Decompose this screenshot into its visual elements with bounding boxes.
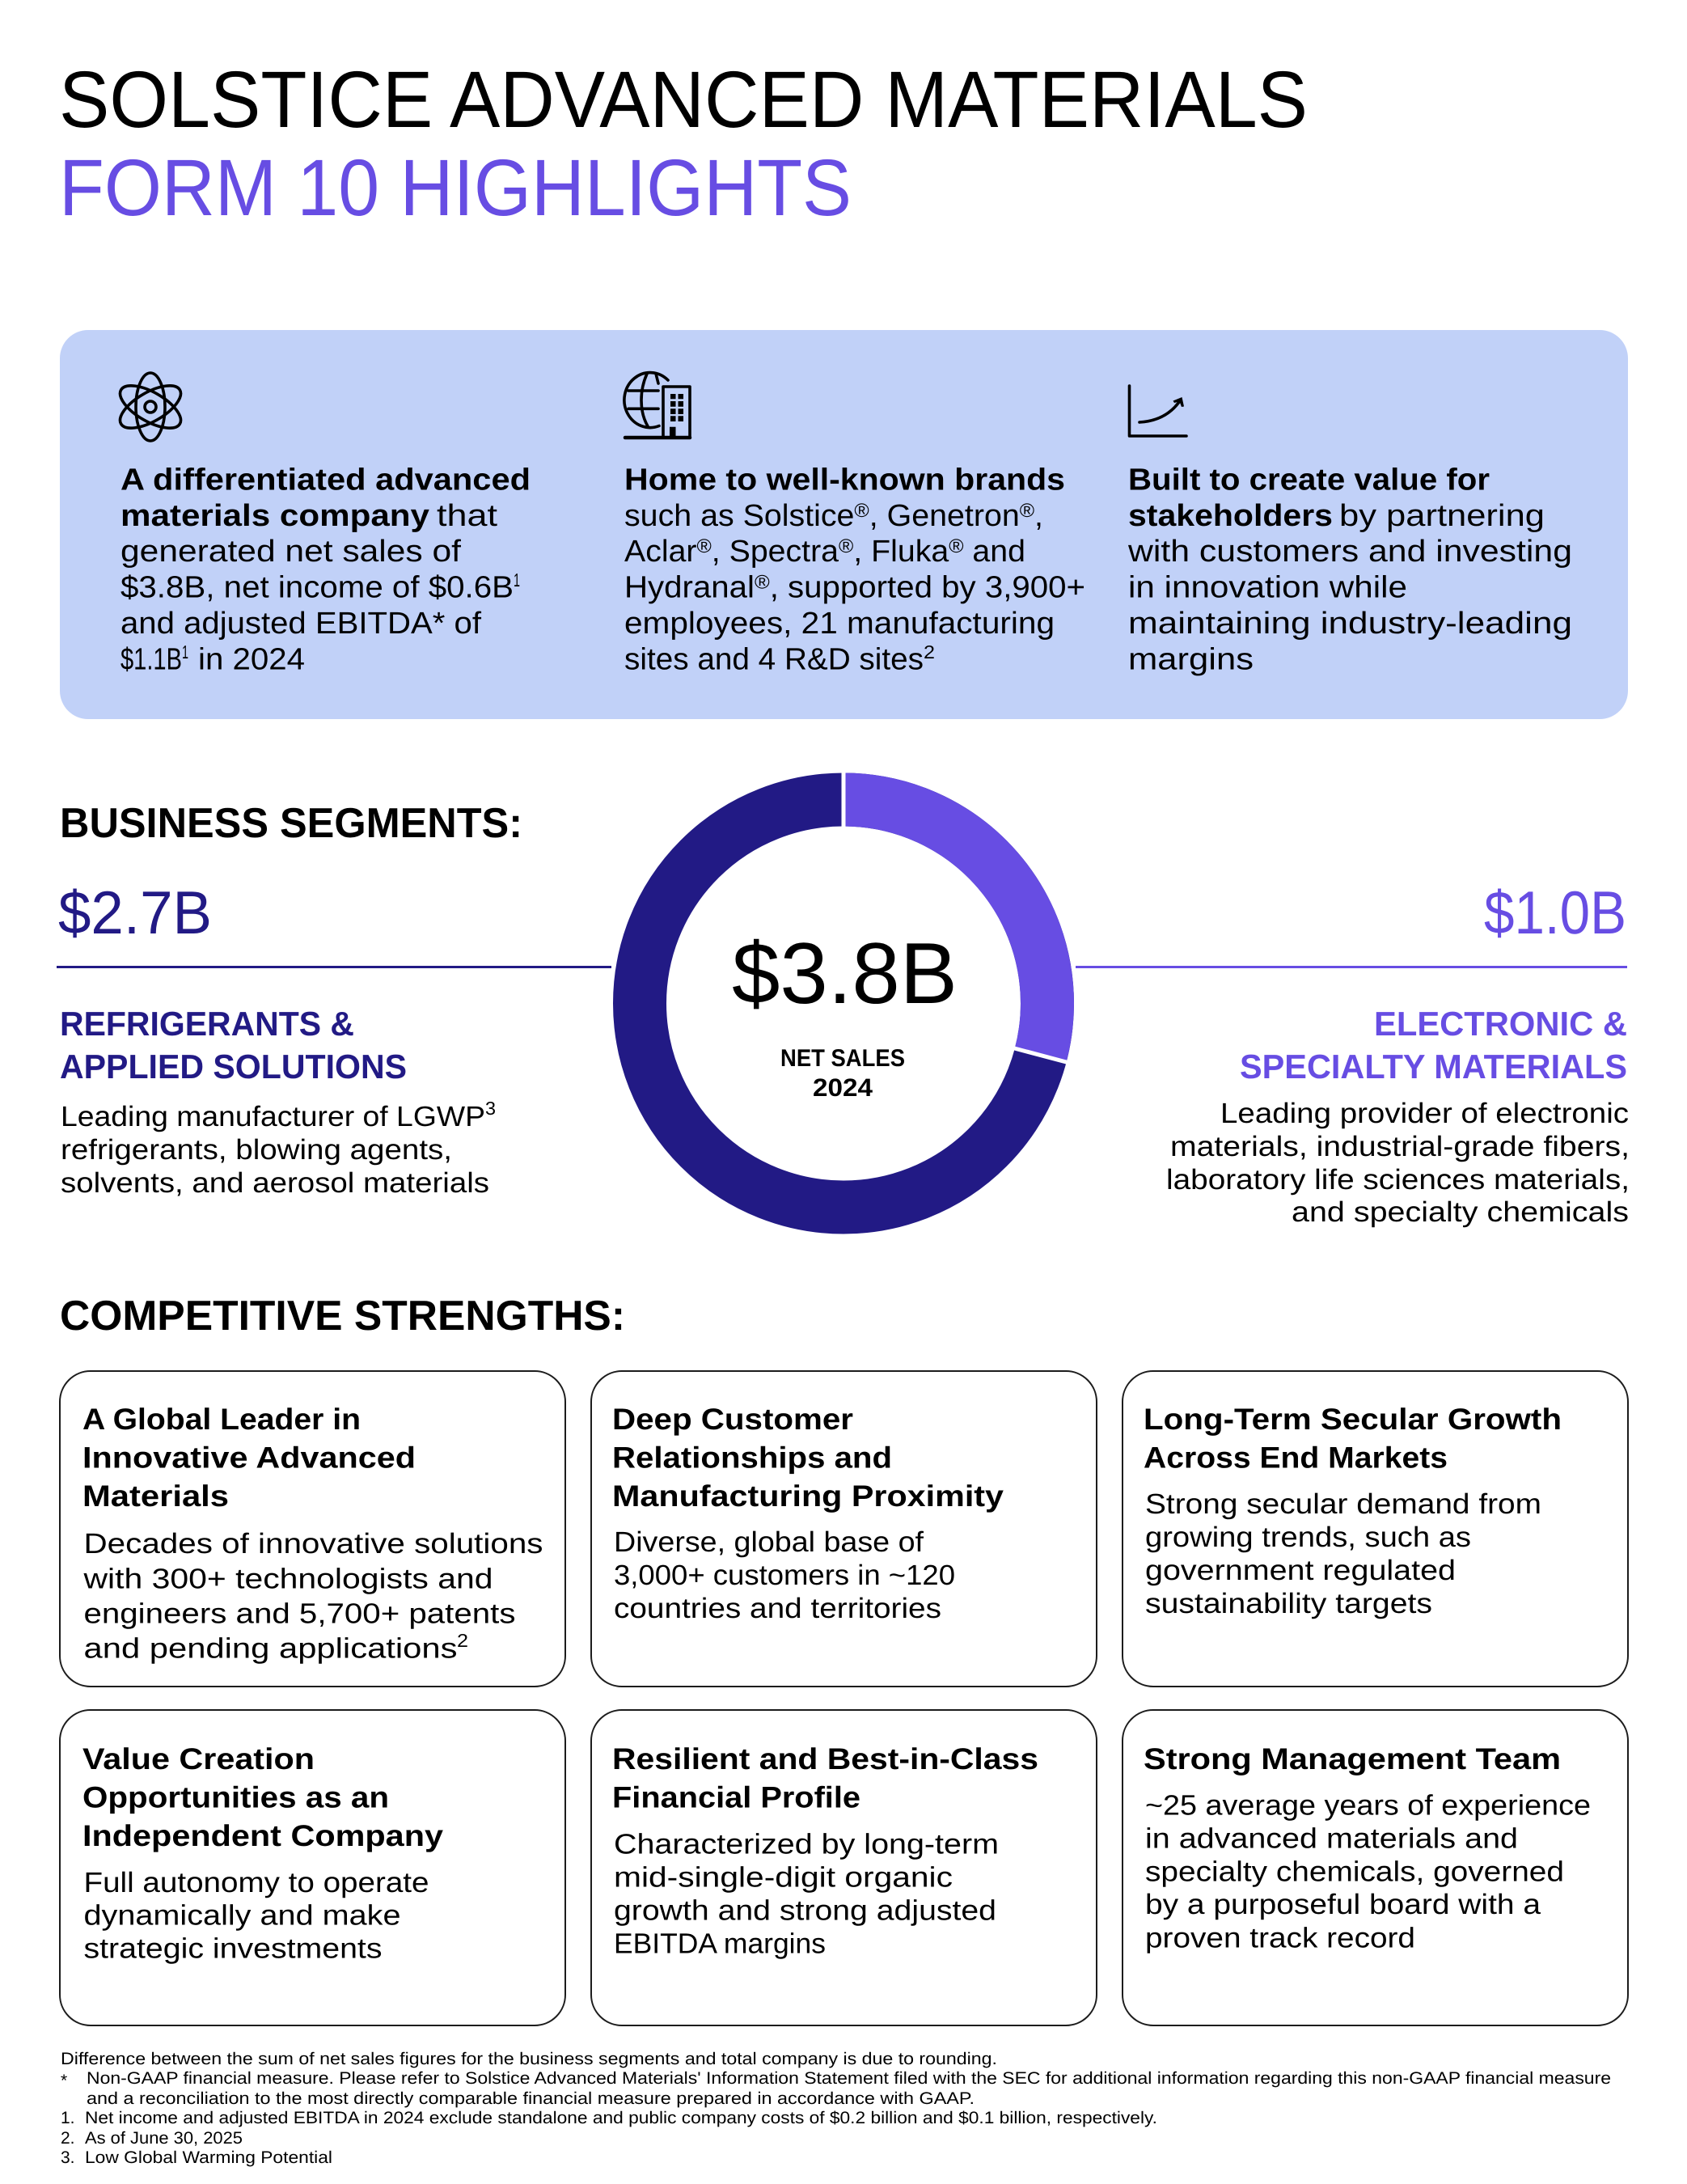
title: FORM 10 HIGHLIGHTS	[59, 142, 852, 232]
card: customer relationships: Relationships and	[612, 1441, 892, 1474]
footnotes: As of June 30, 2025	[85, 2129, 243, 2148]
card: financial profile: growth and strong adjusted	[614, 1894, 996, 1926]
card: global leader: Innovative Advanced	[82, 1441, 416, 1474]
donut center label: $3.8B	[732, 925, 958, 1022]
segment: refrigerants and applied solutions: refrigerants, blowing agents,	[61, 1134, 452, 1166]
text: value for stakeholders: margins	[1128, 642, 1254, 676]
text: well-known brands: ®	[854, 500, 869, 522]
text: differentiated company: $1.1B	[120, 642, 182, 676]
card: financial profile: Resilient and Best-in-Class	[612, 1742, 1038, 1776]
card: management team: specialty chemicals, governed	[1145, 1856, 1564, 1887]
text: well-known brands: Hydranal	[624, 571, 747, 605]
segment: refrigerants and applied solutions: $2.7B	[58, 878, 212, 946]
title	[59, 54, 1308, 232]
card: value creation: Independent Company	[82, 1819, 443, 1852]
card: value creation: dynamically and make	[84, 1900, 400, 1932]
card: customer relationships: Manufacturing Proximity	[612, 1479, 1004, 1513]
text: differentiated company: A differentiated advanced	[120, 463, 531, 497]
card: customer relationships	[591, 1371, 1097, 1687]
segment: refrigerants and applied solutions: REFRIGERANTS &	[60, 1005, 354, 1043]
footnotes: 1.	[61, 2109, 75, 2127]
segment: refrigerants and applied solutions: Leading manufacturer of LGWP	[61, 1101, 485, 1132]
segment: electronic and specialty materials: and specialty chemicals	[1292, 1196, 1629, 1228]
card: customer relationships: Diverse, global base of	[614, 1526, 924, 1558]
segment: electronic and specialty materials: SPECIALTY MATERIALS	[1240, 1048, 1627, 1086]
text: well-known brands: ®	[697, 535, 712, 557]
card: financial profile: Financial Profile	[612, 1781, 860, 1814]
card: management team: in advanced materials and	[1145, 1823, 1518, 1855]
footnotes: and a reconciliation to the most directly comparable financial measure prepared in accordance with GAAP.	[87, 2089, 975, 2108]
donut center label: 2024	[813, 1073, 873, 1102]
text: differentiated company: 1	[182, 641, 188, 662]
title: SOLSTICE ADVANCED MATERIALS	[59, 54, 1308, 144]
card: global leader: Materials	[82, 1479, 229, 1513]
text: differentiated company: generated net sales of	[120, 535, 461, 569]
segment: refrigerants and applied solutions: 3	[485, 1098, 496, 1119]
text: well-known brands: Aclar	[624, 535, 695, 569]
card: global leader: A Global Leader in	[82, 1403, 361, 1436]
card: secular growth: government regulated	[1145, 1555, 1456, 1586]
card: management team: ~25 average years of experience	[1145, 1789, 1591, 1821]
segment: electronic and specialty materials	[1076, 878, 1630, 1228]
card: global leader: and pending applications	[84, 1632, 458, 1664]
card: secular growth: Strong secular demand from	[1145, 1488, 1541, 1520]
card: customer relationships: 3,000+ customers in ~120	[614, 1560, 955, 1591]
footnotes: *	[61, 2072, 67, 2090]
text: well-known brands: ®	[1020, 500, 1034, 522]
segment: electronic and specialty materials: ELECTRONIC &	[1374, 1005, 1627, 1043]
card: customer relationships: countries and territories	[614, 1593, 941, 1624]
text: differentiated company	[120, 463, 531, 676]
text: value for stakeholders: with customers and investing	[1127, 535, 1572, 569]
segment: electronic and specialty materials: laboratory life sciences materials,	[1166, 1164, 1630, 1196]
card: financial profile: mid-single-digit organic	[614, 1862, 953, 1894]
text: differentiated company: that	[437, 499, 498, 533]
text: value for stakeholders: in innovation while	[1128, 571, 1407, 605]
card: secular growth: sustainability targets	[1145, 1588, 1432, 1619]
text: value for stakeholders	[1127, 463, 1572, 676]
card: secular growth: Long-Term Secular Growth	[1144, 1403, 1562, 1436]
text: differentiated company: 1	[514, 569, 520, 590]
icon: growth chart	[1129, 386, 1186, 436]
text: well-known brands: such as Solstice	[624, 499, 847, 533]
card: value creation: Value Creation	[82, 1742, 315, 1776]
footnotes	[61, 2050, 1611, 2167]
text: well-known brands: , Fluka	[853, 535, 949, 569]
card: management team: Strong Management Team	[1144, 1742, 1561, 1776]
panel: company highlights	[60, 330, 1628, 719]
text: value for stakeholders: maintaining industry-leading	[1128, 607, 1572, 641]
text: well-known brands: ®	[755, 571, 770, 594]
icon: globe and building	[624, 373, 690, 438]
text: well-known brands: ,	[1034, 499, 1043, 533]
text: differentiated company: materials company	[120, 499, 429, 533]
footnotes: Non-GAAP financial measure. Please refer to Solstice Advanced Materials' Information Statement filed with the SEC for additional information regarding this non-GAAP financial measure	[87, 2069, 1611, 2088]
card: management team: proven track record	[1145, 1922, 1415, 1953]
segment: electronic and specialty materials: materials, industrial-grade fibers,	[1170, 1131, 1630, 1162]
card: secular growth: Across End Markets	[1144, 1441, 1448, 1474]
text: well-known brands: sites and 4 R&D sites	[624, 642, 924, 676]
segment: refrigerants and applied solutions: APPLIED SOLUTIONS	[60, 1048, 407, 1086]
card: value creation: strategic investments	[84, 1933, 382, 1965]
text: well-known brands: , Genetron	[869, 499, 1020, 533]
text: differentiated company: and adjusted EBITDA* of	[120, 607, 481, 641]
card: global leader: 2	[457, 1630, 468, 1651]
text: well-known brands: ®	[839, 535, 854, 557]
footnotes: 2.	[61, 2129, 75, 2148]
footnotes: Difference between the sum of net sales figures for the business segments and total company is due to rounding.	[61, 2050, 997, 2068]
donut center label	[732, 925, 958, 1102]
icon: atom	[114, 373, 187, 441]
card: financial profile: Characterized by long-term	[614, 1829, 999, 1860]
text: well-known brands: , Spectra	[712, 535, 839, 569]
card: financial profile: EBITDA margins	[614, 1928, 826, 1960]
segment: refrigerants and applied solutions	[57, 878, 611, 1199]
segment: refrigerants and applied solutions: solvents, and aerosol materials	[61, 1167, 489, 1199]
card: financial profile	[591, 1710, 1097, 2025]
footnotes: Low Global Warming Potential	[85, 2148, 332, 2167]
text: well-known brands: ®	[949, 535, 964, 557]
text: value for stakeholders: by partnering	[1339, 499, 1545, 533]
card: management team: by a purposeful board with a	[1145, 1889, 1541, 1920]
segment: electronic and specialty materials: Leading provider of electronic	[1220, 1098, 1629, 1129]
heading: competitive strengths: COMPETITIVE STRENGTHS:	[60, 1293, 625, 1340]
card: customer relationships: Deep Customer	[612, 1403, 853, 1436]
text: well-known brands: employees, 21 manufacturing	[624, 607, 1055, 641]
text: well-known brands: Home to well-known brands	[624, 463, 1065, 497]
text: value for stakeholders: stakeholders	[1128, 499, 1333, 533]
card: value creation: Full autonomy to operate	[84, 1867, 429, 1898]
segment: electronic and specialty materials: $1.0B	[1484, 878, 1626, 946]
card: secular growth	[1123, 1371, 1628, 1687]
text: well-known brands: 2	[924, 641, 935, 662]
card: global leader: engineers and 5,700+ patents	[84, 1598, 516, 1630]
heading: business segments: BUSINESS SEGMENTS:	[60, 800, 522, 847]
card: global leader: with 300+ technologists and	[82, 1563, 493, 1594]
donut center label: NET SALES	[780, 1045, 905, 1072]
card: management team	[1123, 1710, 1628, 2025]
text: well-known brands	[624, 463, 1085, 676]
card: global leader: Decades of innovative solutions	[84, 1528, 543, 1560]
text: well-known brands: , supported by 3,900+	[770, 571, 1085, 605]
footnotes: Net income and adjusted EBITDA in 2024 exclude standalone and public company costs of $0.2 billion and $0.1 billion, respectively.	[85, 2109, 1157, 2127]
text: differentiated company: in 2024	[198, 642, 305, 676]
footnotes: 3.	[61, 2148, 75, 2167]
donut chart: net sales	[640, 768, 1072, 1207]
card: value creation	[60, 1710, 565, 2025]
text: well-known brands: and	[964, 535, 1025, 569]
text: differentiated company: $3.8B, net income of $0.6B	[120, 571, 514, 605]
card: secular growth: growing trends, such as	[1145, 1522, 1471, 1553]
card: global leader	[60, 1371, 565, 1687]
text: value for stakeholders: Built to create value for	[1128, 463, 1490, 497]
card: value creation: Opportunities as an	[82, 1781, 389, 1814]
